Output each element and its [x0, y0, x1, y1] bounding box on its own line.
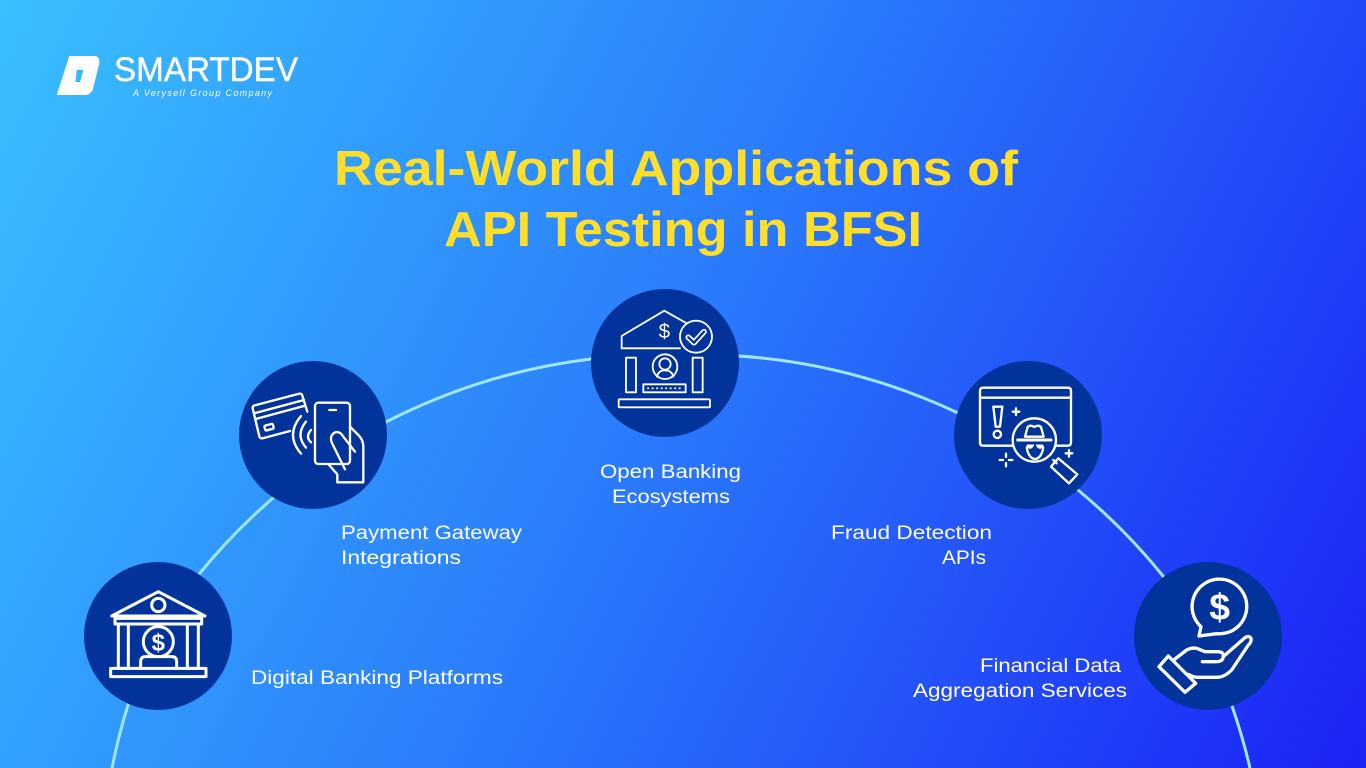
label: Fraud Detection	[831, 523, 992, 544]
icon: hand with dollar speech bubble	[1159, 579, 1251, 692]
arc connector	[112, 353, 1250, 768]
label: Ecosystems	[612, 487, 730, 508]
label: Digital Banking Platforms	[251, 668, 503, 689]
label	[913, 656, 1127, 702]
label: Integrations	[341, 548, 461, 569]
icon: magnifier over spy on a window	[980, 388, 1077, 483]
label: Financial Data	[980, 656, 1121, 677]
title	[334, 142, 1019, 257]
label: APIs	[942, 548, 986, 569]
title: API Testing in BFSI	[444, 203, 922, 257]
icon: bank with check mark	[619, 311, 712, 407]
logo mark	[57, 56, 99, 95]
icon badge	[954, 361, 1102, 509]
panel: payment gateway integrations	[239, 361, 523, 569]
label: Aggregation Services	[913, 681, 1127, 702]
label	[831, 523, 992, 569]
panel: digital banking platforms	[84, 562, 503, 710]
icon: bank with dollar coin: $	[152, 629, 165, 656]
icon badge	[591, 289, 739, 437]
label	[341, 523, 523, 569]
icon badge	[1134, 562, 1282, 710]
icon: bank with check mark: $	[659, 320, 671, 343]
logo	[57, 51, 298, 98]
panel: financial data aggregation services	[913, 562, 1282, 710]
icon: bank with dollar coin	[111, 592, 206, 677]
icon badge	[84, 562, 232, 710]
label: Payment Gateway	[341, 523, 523, 544]
icon: hand with dollar speech bubble: $	[1209, 585, 1230, 627]
icon badge	[239, 361, 387, 509]
icon: card and phone tap	[253, 394, 363, 482]
panel: open banking ecosystems	[591, 289, 741, 508]
logo tagline: A Verysell Group Company	[132, 88, 272, 98]
label: Open Banking	[600, 462, 741, 483]
logo wordmark: SMARTDEV	[114, 51, 298, 89]
panel: fraud detection apis	[831, 361, 1102, 569]
title: Real-World Applications of	[334, 142, 1019, 196]
label	[600, 462, 741, 508]
